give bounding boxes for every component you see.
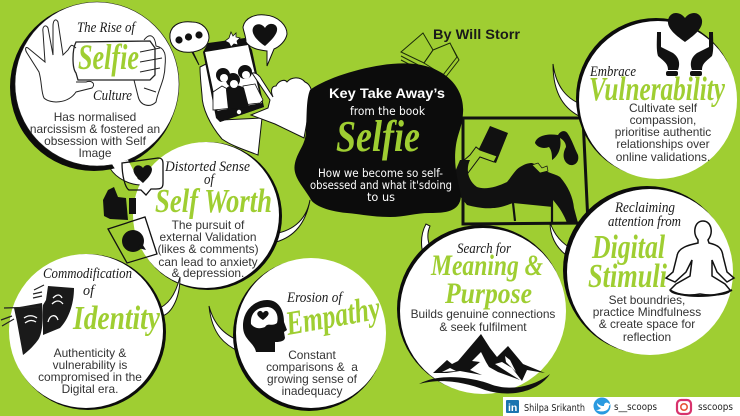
body text <box>38 346 142 396</box>
body text: reflection <box>623 330 671 344</box>
icon: handheld phone <box>476 126 508 163</box>
sub heading: Culture <box>93 88 132 104</box>
body text: Cultivate self <box>629 101 698 115</box>
body text: Set boundries, <box>609 293 685 307</box>
body text <box>593 293 701 344</box>
author credit: By Will Storr <box>433 26 521 42</box>
heading: Commodification <box>43 266 132 282</box>
body text: relationships over <box>616 137 710 151</box>
highlight words: Digital <box>591 229 665 266</box>
body text <box>615 101 711 164</box>
heading: Erosion of <box>286 290 344 306</box>
icon: phone <box>203 38 264 122</box>
icon: twitter <box>594 398 611 414</box>
body text: vulnerability is <box>53 358 127 372</box>
icon: head with heart <box>243 300 287 352</box>
body text <box>266 348 358 398</box>
icon: heart notification <box>122 158 163 195</box>
subtitle: from the book <box>350 104 425 118</box>
highlight words: Stimuli <box>588 258 667 295</box>
body text: Authenticity & <box>54 346 126 360</box>
heading: Reclaiming <box>614 200 675 216</box>
body text: can lead to anxiety <box>158 255 258 269</box>
icon: theatre masks <box>1 285 74 355</box>
body text: Image <box>78 146 112 160</box>
icon: meditating person <box>666 221 734 296</box>
icon: camera flash <box>225 32 240 47</box>
body text: obsession with Self <box>44 134 147 148</box>
illustration: woman taking selfie in frame <box>455 118 588 224</box>
body text: practice Mindfulness <box>593 305 701 319</box>
heading: Search for <box>457 241 511 257</box>
body text: Builds genuine connections <box>411 307 555 321</box>
icon: hands framing phone <box>26 20 165 105</box>
panel: embrace vulnerability <box>553 13 737 179</box>
body text: Has normalised <box>54 110 136 124</box>
woman's face <box>537 146 552 165</box>
body text: The pursuit of <box>172 218 245 232</box>
body text: (likes & comments) <box>157 242 259 256</box>
icon: open book <box>401 33 459 78</box>
body text: inadequacy <box>282 384 342 398</box>
highlight word: Selfie <box>78 37 139 77</box>
heading <box>608 200 681 230</box>
panel: erosion of empathy <box>209 258 386 411</box>
body text: & depression. <box>172 266 244 280</box>
icon: left hand holding phone <box>200 64 262 155</box>
book description: to us <box>367 190 395 204</box>
panel: reclaiming attention from digital stimuli <box>550 186 734 355</box>
panel: the rise of selfie culture <box>10 2 179 185</box>
highlight words: Meaning & <box>430 249 543 282</box>
panel: commodification of identity <box>1 254 180 410</box>
heading: Embrace <box>589 64 636 80</box>
highlight word: Empathy <box>282 290 384 343</box>
body text: narcissism & fostered an <box>30 122 160 136</box>
instagram handle: sscoops <box>698 402 733 413</box>
connector word: of <box>204 172 216 188</box>
title: Key Take Away’s <box>329 85 445 101</box>
book description: How we become so self- <box>318 166 443 180</box>
body text: comparisons & a <box>266 360 358 374</box>
book description <box>310 166 452 204</box>
highlight word: Identity <box>72 300 161 337</box>
icon: three dots speech bubble <box>170 22 209 65</box>
book name: Selfie <box>336 112 420 161</box>
icon: right hand pointing <box>251 73 312 138</box>
linkedin name: Shilpa Srikanth <box>524 403 585 414</box>
woman's collar <box>532 163 548 173</box>
twitter handle: s__scoops <box>614 402 657 413</box>
heading: The Rise of <box>77 20 137 36</box>
body text <box>411 307 555 334</box>
icon: instagram <box>677 400 691 414</box>
highlight words: Self Worth <box>155 183 272 220</box>
body text: growing sense of <box>267 372 358 386</box>
woman's hair and ponytail <box>535 131 578 165</box>
heading: attention from <box>608 214 681 230</box>
body text: prioritise authentic <box>615 125 711 139</box>
body text: external Validation <box>160 230 256 244</box>
highlight words: Purpose <box>444 277 532 310</box>
icon: thumbs up <box>103 187 136 220</box>
body text: & seek fulfilment <box>439 320 527 334</box>
footer: social credits <box>503 397 740 416</box>
icon: hands holding heart <box>657 13 713 76</box>
icon: linkedin: in <box>508 402 517 414</box>
connector word: of <box>83 283 96 299</box>
panel: central title blob <box>294 63 463 217</box>
body text: compassion, <box>630 113 696 127</box>
woman's arm and body <box>455 160 578 223</box>
icon: linkedin <box>506 400 519 414</box>
highlight words <box>588 229 667 295</box>
icon: mountains <box>419 334 550 393</box>
body text: Constant <box>288 348 336 362</box>
body text: online validations. <box>616 150 710 164</box>
icon: comment box <box>108 217 157 263</box>
body text: & create space for <box>599 317 695 331</box>
illustration: phone held in hands <box>170 15 312 155</box>
body text: compromised in the <box>38 370 142 384</box>
panel: distorted sense of self worth <box>133 142 310 290</box>
panel: search for meaning and purpose <box>397 224 566 394</box>
heading: Distorted Sense <box>164 159 250 175</box>
body text: Digital era. <box>62 382 118 396</box>
highlight words <box>430 249 543 310</box>
body text <box>157 218 259 280</box>
body text <box>30 110 160 160</box>
book description: obsessed and what it'sdoing <box>310 178 452 192</box>
icon: heart speech bubble <box>243 15 287 66</box>
